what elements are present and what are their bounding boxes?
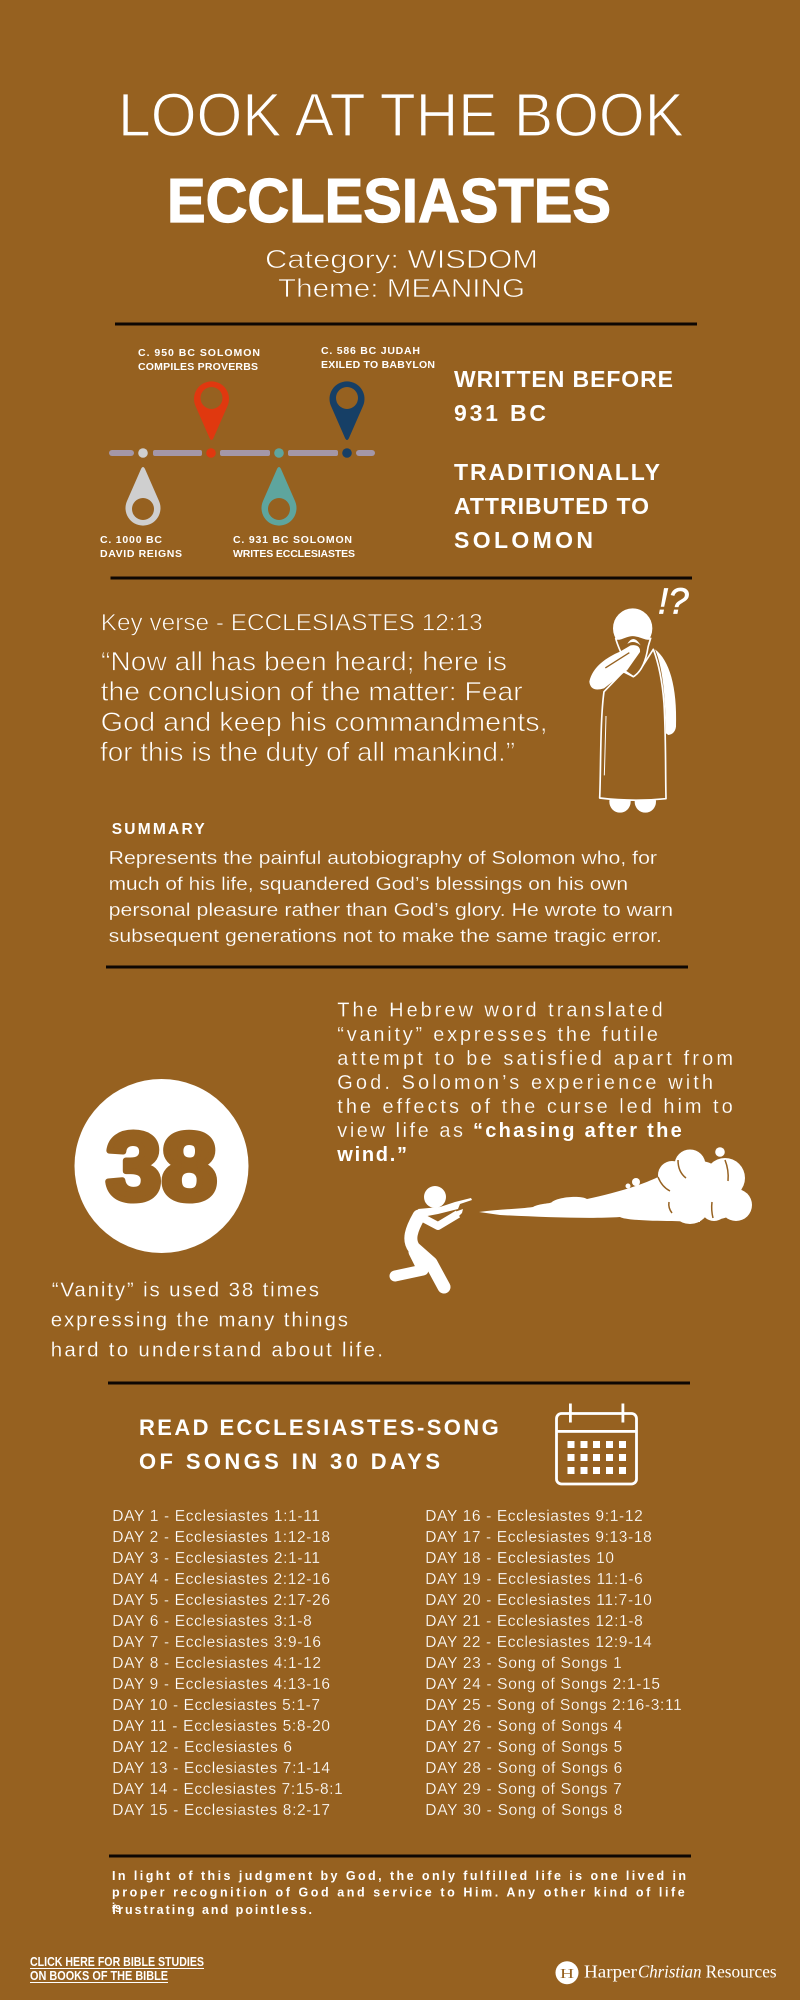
summary text: subsequent generations not to make the same tragic error.	[109, 926, 662, 946]
closing statement	[112, 1869, 686, 1917]
reading list: days 1 to 15: DAY 11 - Ecclesiastes 5:8-20	[112, 1718, 330, 1735]
pin: 586 BC	[330, 381, 364, 440]
label: 586 BC	[321, 345, 435, 371]
reading list: days 16 to 30: DAY 22 - Ecclesiastes 12:9-14	[425, 1634, 652, 1651]
label: 1000 BC	[100, 534, 182, 560]
right arm	[655, 649, 676, 735]
closing statement: proper recognition of God and service to Him. Any other kind of life	[112, 1886, 685, 1900]
reading list: days 1 to 15: DAY 8 - Ecclesiastes 4:1-12	[112, 1655, 321, 1672]
summary text: much of his life, squandered God’s blessings on his own	[109, 874, 628, 894]
key verse quote: “Now all has been heard; here is	[101, 647, 507, 677]
timeline bar	[109, 450, 375, 456]
pin: 1000 BC	[126, 467, 160, 526]
stat: 38 circle	[74, 1079, 248, 1253]
reading list: days 1 to 15	[112, 1508, 343, 1819]
reading list: days 1 to 15: DAY 10 - Ecclesiastes 5:1-7	[112, 1697, 320, 1714]
head	[613, 608, 652, 648]
reading list: days 16 to 30: DAY 18 - Ecclesiastes 10	[425, 1550, 614, 1567]
vanity explanation text	[336, 1000, 733, 1166]
key verse heading: Key verse - ECCLESIASTES 12:13	[101, 610, 483, 637]
label: 950 BC	[138, 347, 260, 373]
reading plan heading	[139, 1415, 499, 1474]
vanity explanation text: “chasing after the	[473, 1120, 682, 1142]
icon: puzzled figure	[589, 580, 689, 813]
panel: timeline	[100, 345, 435, 560]
label: 586 BC: EXILED TO BABYLON	[321, 359, 435, 371]
exclamation and question marks: !?	[658, 580, 689, 621]
vanity explanation text: view life as	[337, 1120, 463, 1142]
reading list: days 16 to 30: DAY 26 - Song of Songs 4	[425, 1718, 623, 1735]
face and beard	[616, 635, 651, 677]
authorship text: ATTRIBUTED TO	[454, 493, 649, 519]
authorship text: SOLOMON	[454, 527, 593, 553]
category: Category: WISDOM	[265, 244, 538, 274]
label: 586 BC: C. 586 BC JUDAH	[321, 345, 420, 357]
reading list: days 16 to 30: DAY 28 - Song of Songs 6	[425, 1760, 622, 1777]
panel: summary	[109, 821, 673, 946]
reading list: days 16 to 30	[425, 1508, 682, 1819]
logo: HarperChristian Resources	[556, 1961, 777, 1984]
reading list: days 1 to 15: DAY 12 - Ecclesiastes 6	[112, 1739, 292, 1756]
vanity explanation text: The Hebrew word translated	[337, 1000, 663, 1022]
reading list: days 1 to 15: DAY 4 - Ecclesiastes 2:12-16	[112, 1571, 330, 1588]
vanity explanation text: the effects of the curse led him to	[337, 1096, 733, 1118]
reading list: days 16 to 30: DAY 24 - Song of Songs 2:1-15	[425, 1676, 660, 1693]
reading plan heading: READ ECCLESIASTES-SONG	[139, 1415, 499, 1440]
logo wordmark: Resources	[706, 1962, 777, 1982]
wind plume	[479, 1170, 700, 1222]
reading list: days 1 to 15: DAY 14 - Ecclesiastes 7:15-8:1	[112, 1781, 343, 1798]
closing statement: In light of this judgment by God, the only fulfilled life is one lived in	[112, 1869, 686, 1883]
summary text: Represents the painful autobiography of Solomon who, for	[109, 848, 657, 868]
key verse quote: God and keep his commandments,	[101, 707, 548, 737]
link: bible studies	[30, 1954, 204, 1983]
authorship text: WRITTEN BEFORE	[454, 366, 673, 392]
robe	[600, 649, 666, 800]
key verse quote	[100, 647, 548, 767]
label: 950 BC: COMPILES PROVERBS	[138, 361, 258, 373]
heading: ecclesiastes: ECCLESIASTES	[167, 167, 611, 236]
closing statement: is	[112, 1901, 121, 1915]
key verse quote: for this is the duty of all mankind.”	[100, 737, 515, 767]
summary text: personal pleasure rather than God’s glory. He wrote to warn	[109, 900, 673, 920]
logo: HarperChristian Resources: H	[560, 1967, 574, 1982]
label: 931 BC	[233, 534, 355, 560]
cloud	[626, 1147, 752, 1224]
theme: Theme: MEANING	[278, 273, 525, 303]
reading list: days 16 to 30: DAY 16 - Ecclesiastes 9:1-12	[425, 1508, 643, 1525]
key verse quote: the conclusion of the matter: Fear	[101, 677, 523, 707]
icon: calendar	[556, 1404, 636, 1484]
reading list: days 16 to 30: DAY 19 - Ecclesiastes 11:1-6	[425, 1571, 643, 1588]
reading list: days 1 to 15: DAY 3 - Ecclesiastes 2:1-11	[112, 1550, 320, 1567]
pin: 950 BC	[194, 381, 229, 440]
reading list: days 1 to 15: DAY 15 - Ecclesiastes 8:2-17	[112, 1802, 330, 1819]
reading list: days 16 to 30: DAY 20 - Ecclesiastes 11:7-10	[425, 1592, 652, 1609]
authorship text	[454, 366, 673, 553]
vanity count text	[51, 1279, 383, 1362]
cloud creases	[658, 1160, 728, 1218]
closing statement: frustrating and pointless.	[112, 1903, 312, 1917]
reading list: days 16 to 30: DAY 21 - Ecclesiastes 12:1-8	[425, 1613, 643, 1630]
runner	[395, 1186, 472, 1287]
link: bible studies: ON BOOKS OF THE BIBLE	[30, 1968, 168, 1983]
summary heading: SUMMARY	[112, 821, 205, 838]
authorship text: 931 BC	[454, 400, 546, 426]
reading list: days 1 to 15: DAY 7 - Ecclesiastes 3:9-16	[112, 1634, 321, 1651]
reading list: days 16 to 30: DAY 30 - Song of Songs 8	[425, 1802, 622, 1819]
reading list: days 1 to 15: DAY 13 - Ecclesiastes 7:1-14	[112, 1760, 330, 1777]
heading: look at the book: LOOK AT THE BOOK	[118, 81, 684, 149]
reading list: days 16 to 30: DAY 25 - Song of Songs 2:16-3:11	[425, 1697, 682, 1714]
vanity explanation text: “vanity” expresses the futile	[337, 1024, 658, 1046]
summary text	[109, 848, 673, 946]
nose	[627, 639, 641, 645]
reading list: days 16 to 30: DAY 17 - Ecclesiastes 9:13-18	[425, 1529, 652, 1546]
logo wordmark: Harper	[584, 1962, 637, 1982]
robe fold	[604, 716, 606, 775]
vanity explanation text: God. Solomon’s experience with	[337, 1072, 713, 1094]
timeline dots	[138, 448, 352, 458]
logo mark	[556, 1961, 578, 1984]
reading list: days 1 to 15: DAY 5 - Ecclesiastes 2:17-26	[112, 1592, 330, 1609]
authorship text: TRADITIONALLY	[454, 459, 660, 485]
logo wordmark	[584, 1962, 777, 1982]
reading list: days 1 to 15: DAY 9 - Ecclesiastes 4:13-16	[112, 1676, 330, 1693]
feet	[609, 791, 656, 813]
vanity explanation text: attempt to be satisfied apart from	[337, 1048, 733, 1070]
link: bible studies: CLICK HERE FOR BIBLE STUDIES	[30, 1954, 204, 1969]
reading plan heading: OF SONGS IN 30 DAYS	[139, 1449, 440, 1474]
title block	[118, 81, 684, 303]
label: 1000 BC: C. 1000 BC	[100, 534, 162, 546]
reading list: days 1 to 15: DAY 1 - Ecclesiastes 1:1-11	[112, 1508, 320, 1525]
reading list: days 16 to 30: DAY 29 - Song of Songs 7	[425, 1781, 622, 1798]
stat: 38 circle: 38	[106, 1114, 217, 1220]
raised arm	[589, 645, 640, 690]
reading list: days 16 to 30: DAY 27 - Song of Songs 5	[425, 1739, 622, 1756]
vanity count text: “Vanity” is used 38 times	[52, 1279, 319, 1302]
pin: 931 BC	[262, 467, 296, 526]
logo wordmark: Christian	[638, 1962, 702, 1982]
icon: figure chasing wind	[395, 1147, 752, 1287]
vanity count text: expressing the many things	[51, 1309, 348, 1332]
vanity explanation text: wind.”	[336, 1144, 407, 1166]
label: 1000 BC: DAVID REIGNS	[100, 548, 182, 560]
reading list: days 1 to 15: DAY 2 - Ecclesiastes 1:12-18	[112, 1529, 330, 1546]
sleeve line	[605, 653, 629, 668]
label: 931 BC: C. 931 BC SOLOMON	[233, 534, 352, 546]
vanity count text: hard to understand about life.	[51, 1339, 383, 1362]
label: 931 BC: WRITES ECCLESIASTES	[233, 548, 355, 560]
label: 950 BC: C. 950 BC SOLOMON	[138, 347, 260, 359]
reading list: days 1 to 15: DAY 6 - Ecclesiastes 3:1-8	[112, 1613, 312, 1630]
reading list: days 16 to 30: DAY 23 - Song of Songs 1	[425, 1655, 622, 1672]
